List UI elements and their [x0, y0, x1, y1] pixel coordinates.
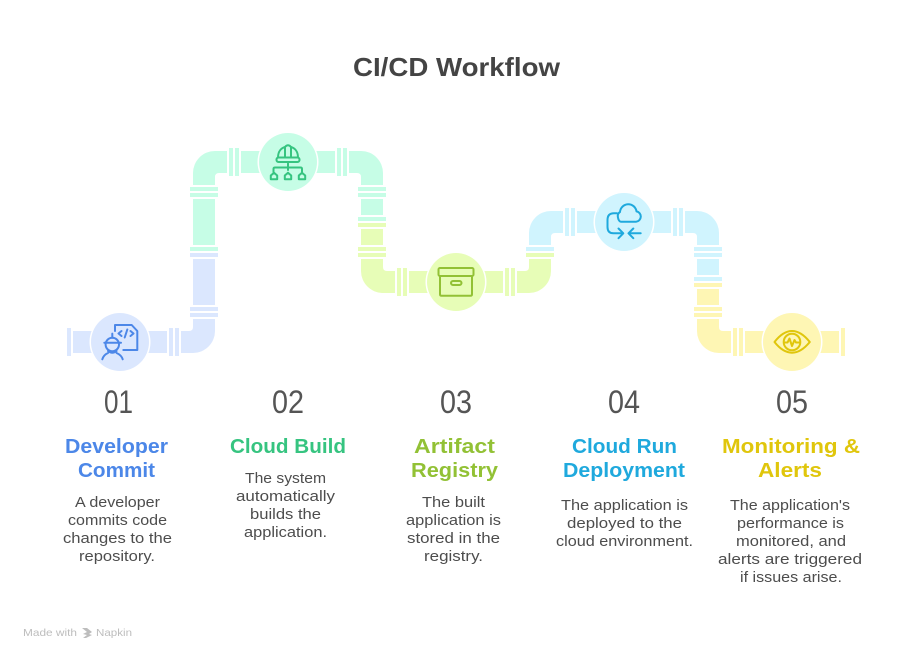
step number: 04	[608, 384, 640, 420]
heading	[563, 436, 685, 482]
heading	[65, 436, 168, 482]
description: alerts are triggered	[718, 552, 862, 568]
pipe section: cloud build	[190, 148, 386, 251]
description: The built	[422, 495, 485, 511]
step 01	[63, 384, 172, 565]
icon: archive box	[426, 252, 486, 312]
description: cloud environment.	[556, 534, 693, 550]
heading: Registry	[411, 460, 499, 482]
description	[556, 498, 693, 550]
icon: cloud with arrows	[594, 192, 654, 252]
pipe section: artifact registry	[358, 223, 554, 296]
description: application is	[406, 513, 501, 529]
step 02	[230, 384, 346, 541]
footer: made with napkin	[23, 627, 132, 639]
heading: Commit	[78, 460, 155, 482]
description: if issues arise.	[740, 570, 842, 586]
heading: Alerts	[758, 460, 822, 482]
step number: 03	[440, 384, 472, 420]
description: monitored, and	[736, 534, 846, 550]
step number: 05	[776, 384, 808, 420]
icon: eye with pulse	[762, 312, 822, 372]
description: A developer	[75, 495, 160, 511]
step 04	[556, 384, 693, 550]
description: deployed to the	[567, 516, 682, 532]
description: performance is	[737, 516, 844, 532]
heading	[722, 436, 860, 482]
description: changes to the	[63, 531, 172, 547]
pipeline	[67, 148, 845, 356]
heading: Deployment	[563, 460, 685, 482]
step 05	[718, 384, 862, 586]
description: stored in the	[407, 531, 500, 547]
description: commits code	[68, 513, 167, 529]
icon: napkin logo	[82, 628, 92, 638]
description: repository.	[79, 549, 155, 565]
pipe section: monitoring and alerts	[694, 283, 845, 356]
description: builds the	[250, 507, 321, 523]
description: registry.	[424, 549, 483, 565]
heading: Cloud Build	[230, 436, 346, 458]
footer: made with napkin: Napkin	[96, 627, 132, 639]
heading: Cloud Run	[572, 436, 677, 458]
description: automatically	[236, 489, 336, 505]
description: The system	[245, 471, 326, 487]
step number: 02	[272, 384, 304, 420]
description: application.	[244, 525, 327, 541]
description: The application's	[730, 498, 850, 514]
description	[236, 471, 336, 541]
icon: developer with code file	[90, 312, 150, 372]
description	[63, 495, 172, 565]
step number: 01	[104, 384, 133, 420]
footer: made with napkin: Made with	[23, 627, 77, 639]
description: The application is	[561, 498, 688, 514]
description	[406, 495, 501, 565]
step 03	[406, 384, 501, 565]
heading: Artifact	[414, 436, 495, 458]
pipe section: developer commit	[67, 253, 218, 356]
heading	[411, 436, 499, 482]
heading: Monitoring &	[722, 436, 860, 458]
title: CI/CD Workflow	[353, 52, 561, 82]
icon: hard hat with build hierarchy	[258, 132, 318, 192]
description	[718, 498, 862, 586]
pipe section: cloud run deployment	[526, 208, 722, 281]
heading: Developer	[65, 436, 168, 458]
